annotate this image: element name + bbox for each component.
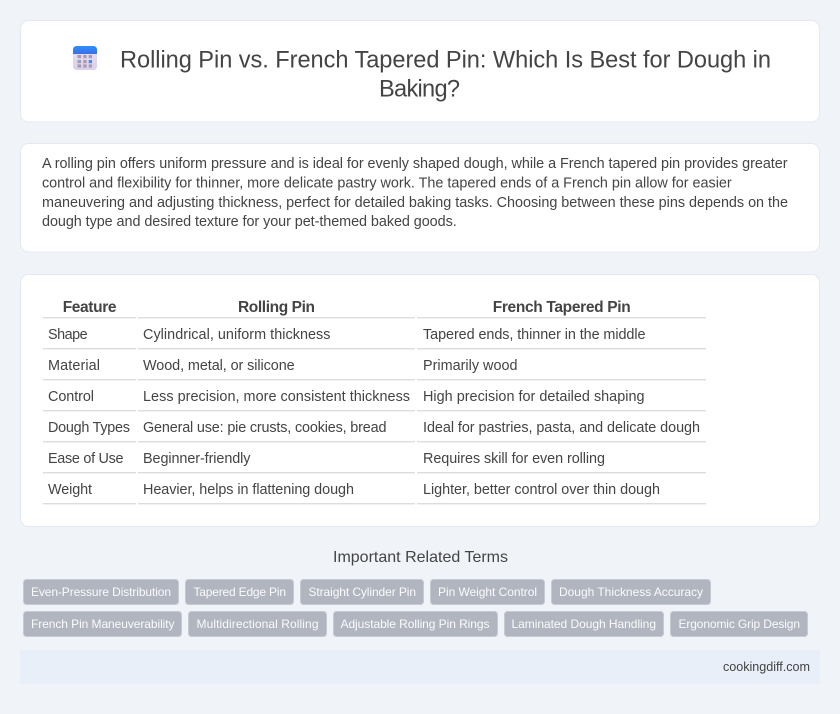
row: ease of use: Beginner-friendly bbox=[143, 451, 251, 467]
row: material bbox=[48, 358, 518, 374]
table header: French Tapered Pin bbox=[493, 299, 631, 316]
row: weight: Weight bbox=[48, 482, 92, 498]
footer bbox=[20, 650, 820, 684]
heading: important related terms: Important Related Terms bbox=[333, 549, 508, 566]
panel: title card bbox=[20, 20, 820, 122]
row: shape: Cylindrical, uniform thickness bbox=[143, 327, 330, 343]
row: shape bbox=[48, 327, 646, 343]
table header: Rolling Pin bbox=[238, 299, 315, 316]
row: material: Material bbox=[48, 358, 100, 374]
table rules bbox=[43, 317, 706, 504]
panel: summary paragraph: maneuvering and adjusting thickness, perfect for detailed baking tasks. Choosing between these pins depends on the bbox=[42, 195, 788, 211]
related term tags: Adjustable Rolling Pin Rings bbox=[340, 617, 490, 631]
related term tags: French Pin Maneuverability bbox=[31, 617, 174, 631]
row: material: Wood, metal, or silicone bbox=[143, 358, 295, 374]
related term tags: Pin Weight Control bbox=[438, 585, 537, 599]
row: ease of use: Requires skill for even rolling bbox=[423, 451, 605, 467]
related term tags: Ergonomic Grip Design bbox=[678, 617, 800, 631]
row: dough types: Dough Types bbox=[48, 420, 130, 436]
related term tags: Tapered Edge Pin bbox=[194, 585, 286, 599]
panel: summary paragraph: A rolling pin offers uniform pressure and is ideal for evenly shaped dough, while a French tapered pin provides greater bbox=[42, 156, 788, 172]
row: control: Less precision, more consistent thickness bbox=[143, 389, 410, 405]
related term tags: Straight Cylinder Pin bbox=[308, 585, 416, 599]
row: control bbox=[48, 389, 644, 405]
panel: summary paragraph: dough type and desired texture for your pet-themed baked goods. bbox=[42, 214, 457, 230]
row: dough types bbox=[48, 420, 700, 436]
panel: summary paragraph bbox=[20, 144, 820, 252]
row: material: Primarily wood bbox=[423, 358, 518, 374]
row: shape: Shape bbox=[48, 327, 88, 343]
panel: summary paragraph: control and flexibility for thinner, more delicate pastry work. The tapered ends of a French pin allow for easier bbox=[42, 176, 732, 192]
title: Rolling Pin vs. French Tapered Pin: Which Is Best for Dough in bbox=[120, 48, 771, 74]
related term tags: Multidirectional Rolling bbox=[196, 617, 318, 631]
row: shape: Tapered ends, thinner in the middle bbox=[423, 327, 646, 343]
table header: Feature bbox=[63, 299, 117, 316]
row: dough types: General use: pie crusts, cookies, bread bbox=[143, 420, 386, 436]
row: ease of use bbox=[48, 451, 605, 467]
row: control: High precision for detailed shaping bbox=[423, 389, 644, 405]
related term tags bbox=[24, 580, 808, 636]
row: weight: Heavier, helps in flattening dough bbox=[143, 482, 354, 498]
row: weight: Lighter, better control over thin dough bbox=[423, 482, 660, 498]
title bbox=[120, 48, 771, 102]
related term tags: Even-Pressure Distribution bbox=[31, 585, 171, 599]
row: dough types: Ideal for pastries, pasta, and delicate dough bbox=[423, 420, 700, 436]
icon: calendar bbox=[73, 46, 97, 70]
row: weight bbox=[48, 482, 660, 498]
title: Baking? bbox=[379, 76, 460, 102]
panel: comparison table bbox=[20, 274, 820, 526]
row: control: Control bbox=[48, 389, 94, 405]
table header bbox=[63, 299, 631, 316]
row: ease of use: Ease of Use bbox=[48, 451, 124, 467]
related term tags: Laminated Dough Handling bbox=[512, 617, 656, 631]
footer: cookingdiff.com bbox=[723, 660, 810, 674]
related term tags: Dough Thickness Accuracy bbox=[559, 585, 703, 599]
